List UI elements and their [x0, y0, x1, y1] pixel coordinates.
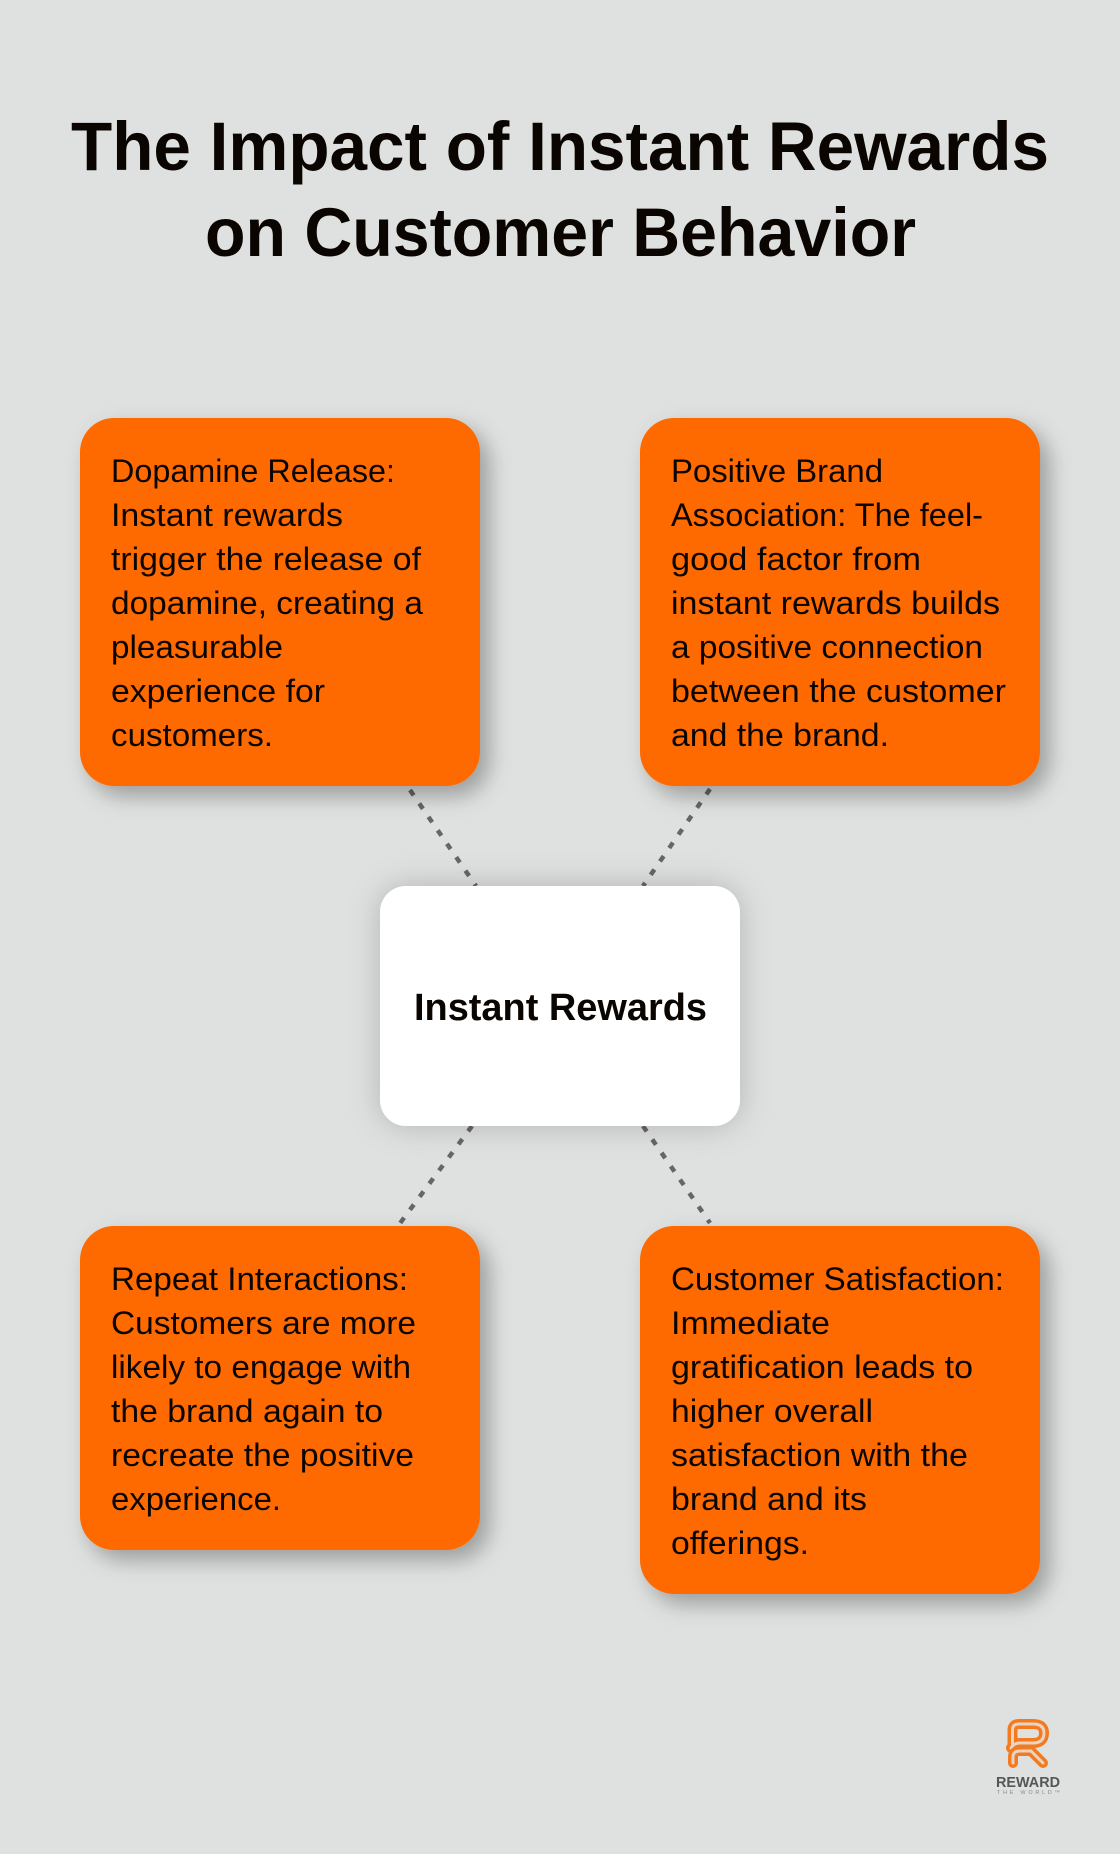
panel: customer satisfaction: brand and its [671, 1481, 867, 1517]
logo: reward the world [996, 1724, 1060, 1796]
panel: repeat interactions: recreate the positive [111, 1437, 414, 1473]
panel: positive brand association: Positive Brand [671, 453, 883, 489]
panel: dopamine release: Instant rewards [111, 497, 343, 533]
connector: satisfaction to center [643, 1126, 710, 1223]
title: The Impact of Instant Rewards [71, 108, 1049, 185]
panel: dopamine release: customers. [111, 717, 273, 753]
connector: brand association to center [643, 789, 710, 886]
panel: customer satisfaction [640, 1226, 1040, 1594]
panel: customer satisfaction: higher overall [671, 1393, 873, 1429]
logo: reward the world: REWARD [996, 1775, 1060, 1791]
panel: positive brand association: a positive connection [671, 629, 983, 665]
panel: repeat interactions: the brand again to [111, 1393, 383, 1429]
panel: repeat interactions: Customers are more [111, 1305, 416, 1341]
connector: repeat interactions to center [398, 1126, 472, 1226]
panel: instant rewards center: Instant Rewards [414, 987, 707, 1029]
panel: dopamine release: trigger the release of [111, 541, 422, 577]
panel: dopamine release: experience for [111, 673, 325, 709]
panel: customer satisfaction: gratification leads to [671, 1349, 973, 1385]
panel: positive brand association: good factor from [671, 541, 921, 577]
panel: positive brand association: Association: The feel- [671, 497, 983, 533]
panel: customer satisfaction: satisfaction with the [671, 1437, 968, 1473]
title: on Customer Behavior [205, 194, 916, 271]
panel: positive brand association [640, 418, 1040, 786]
panel: dopamine release: Dopamine Release: [111, 453, 395, 489]
panel: dopamine release [80, 418, 480, 786]
connector: dopamine to center [410, 790, 476, 886]
panel: dopamine release: dopamine, creating a [111, 585, 424, 621]
panel: repeat interactions: experience. [111, 1481, 281, 1517]
panel: customer satisfaction: Customer Satisfaction: [671, 1261, 1004, 1297]
title [71, 108, 1049, 271]
logo: reward the world: THE WORLD™ [997, 1790, 1060, 1796]
panel: dopamine release: pleasurable [111, 629, 283, 665]
panel: positive brand association: between the customer [671, 673, 1006, 709]
panel: positive brand association: instant rewards builds [671, 585, 1000, 621]
icon: R mark [1011, 1724, 1044, 1763]
panel: instant rewards center [380, 886, 740, 1126]
panel: repeat interactions: Repeat Interactions: [111, 1261, 408, 1297]
panel: repeat interactions [80, 1226, 480, 1550]
panel: customer satisfaction: offerings. [671, 1525, 809, 1561]
panel: repeat interactions: likely to engage with [111, 1349, 411, 1385]
panel: positive brand association: and the brand. [671, 717, 889, 753]
panel: customer satisfaction: Immediate [671, 1305, 830, 1341]
